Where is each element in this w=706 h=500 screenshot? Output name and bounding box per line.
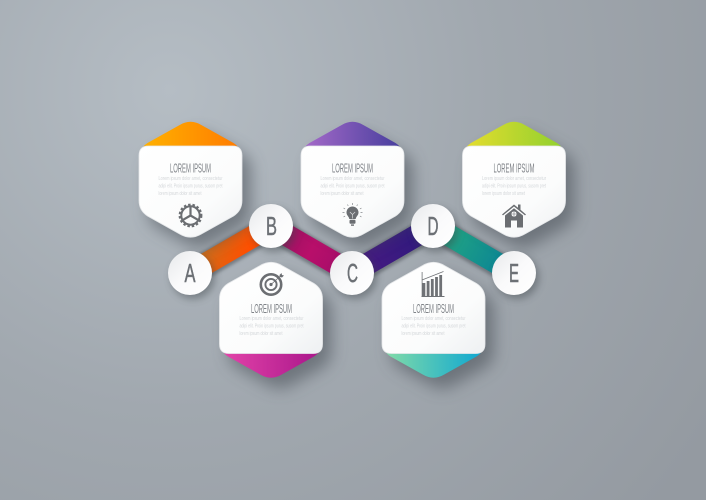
panel: hexagon bulb <box>301 122 413 248</box>
text block <box>158 176 223 197</box>
badge A: A <box>184 258 196 288</box>
icon: target <box>261 273 284 295</box>
connector bars A to E <box>190 226 514 274</box>
text block: Lorem ipsum dolor amet, consectetur <box>158 176 223 182</box>
badge D <box>411 204 458 252</box>
panel: hexagon gear: LOREM IPSUM <box>170 161 211 175</box>
text block: adipi elit. Proin ipsum purus, susom pret <box>320 184 385 190</box>
text block: lorem ipsum dolor sit amet <box>240 331 283 337</box>
icon: gear <box>180 205 201 226</box>
text block: Lorem ipsum dolor amet, consectetur <box>482 176 546 182</box>
text block <box>240 316 304 337</box>
badge C <box>330 251 377 299</box>
connector bar: A to B <box>190 226 271 273</box>
text block: Lorem ipsum dolor amet, consectetur <box>240 316 304 322</box>
badge B: B <box>266 211 277 241</box>
text block: adipi elit. Proin ipsum purus, susom pret <box>482 184 546 190</box>
panel: hexagon chart <box>382 262 494 389</box>
text block <box>320 176 385 197</box>
text block: lorem ipsum dolor sit amet <box>482 191 525 197</box>
panel: hexagon chart: LOREM IPSUM <box>413 302 454 316</box>
connector bar: C to D <box>352 226 433 273</box>
text block: lorem ipsum dolor sit amet <box>158 191 202 197</box>
badge A <box>168 251 215 299</box>
text block: adipi elit. Proin ipsum purus, susom pret <box>402 324 466 330</box>
text block: lorem ipsum dolor sit amet <box>320 191 364 197</box>
text block: adipi elit. Proin ipsum purus, susom pret <box>240 324 304 330</box>
panel: hexagon bulb: LOREM IPSUM <box>332 161 373 175</box>
badge E <box>492 251 539 299</box>
panel: hexagon house <box>462 122 574 248</box>
panel: hexagon target: LOREM IPSUM <box>251 302 292 316</box>
connector bar: B to C <box>271 226 352 273</box>
icon: light bulb <box>342 203 362 225</box>
badge B <box>249 204 296 252</box>
icon: house <box>502 204 526 228</box>
text block: lorem ipsum dolor sit amet <box>402 331 445 337</box>
badge C: C <box>347 258 358 288</box>
connector bar: D to E <box>433 226 514 273</box>
panel: hexagon gear <box>139 122 251 248</box>
text block: adipi elit. Proin ipsum purus, susom pret <box>158 184 223 190</box>
icon: bar chart <box>422 272 444 297</box>
panel: hexagon target <box>220 262 332 389</box>
text block <box>482 176 546 197</box>
panel: hexagon house: LOREM IPSUM <box>494 161 534 175</box>
text block: Lorem ipsum dolor amet, consectetur <box>320 176 385 182</box>
text block: Lorem ipsum dolor amet, consectetur <box>402 316 466 322</box>
badge E: E <box>509 258 519 288</box>
text block <box>402 316 466 337</box>
badge D: D <box>428 211 438 241</box>
